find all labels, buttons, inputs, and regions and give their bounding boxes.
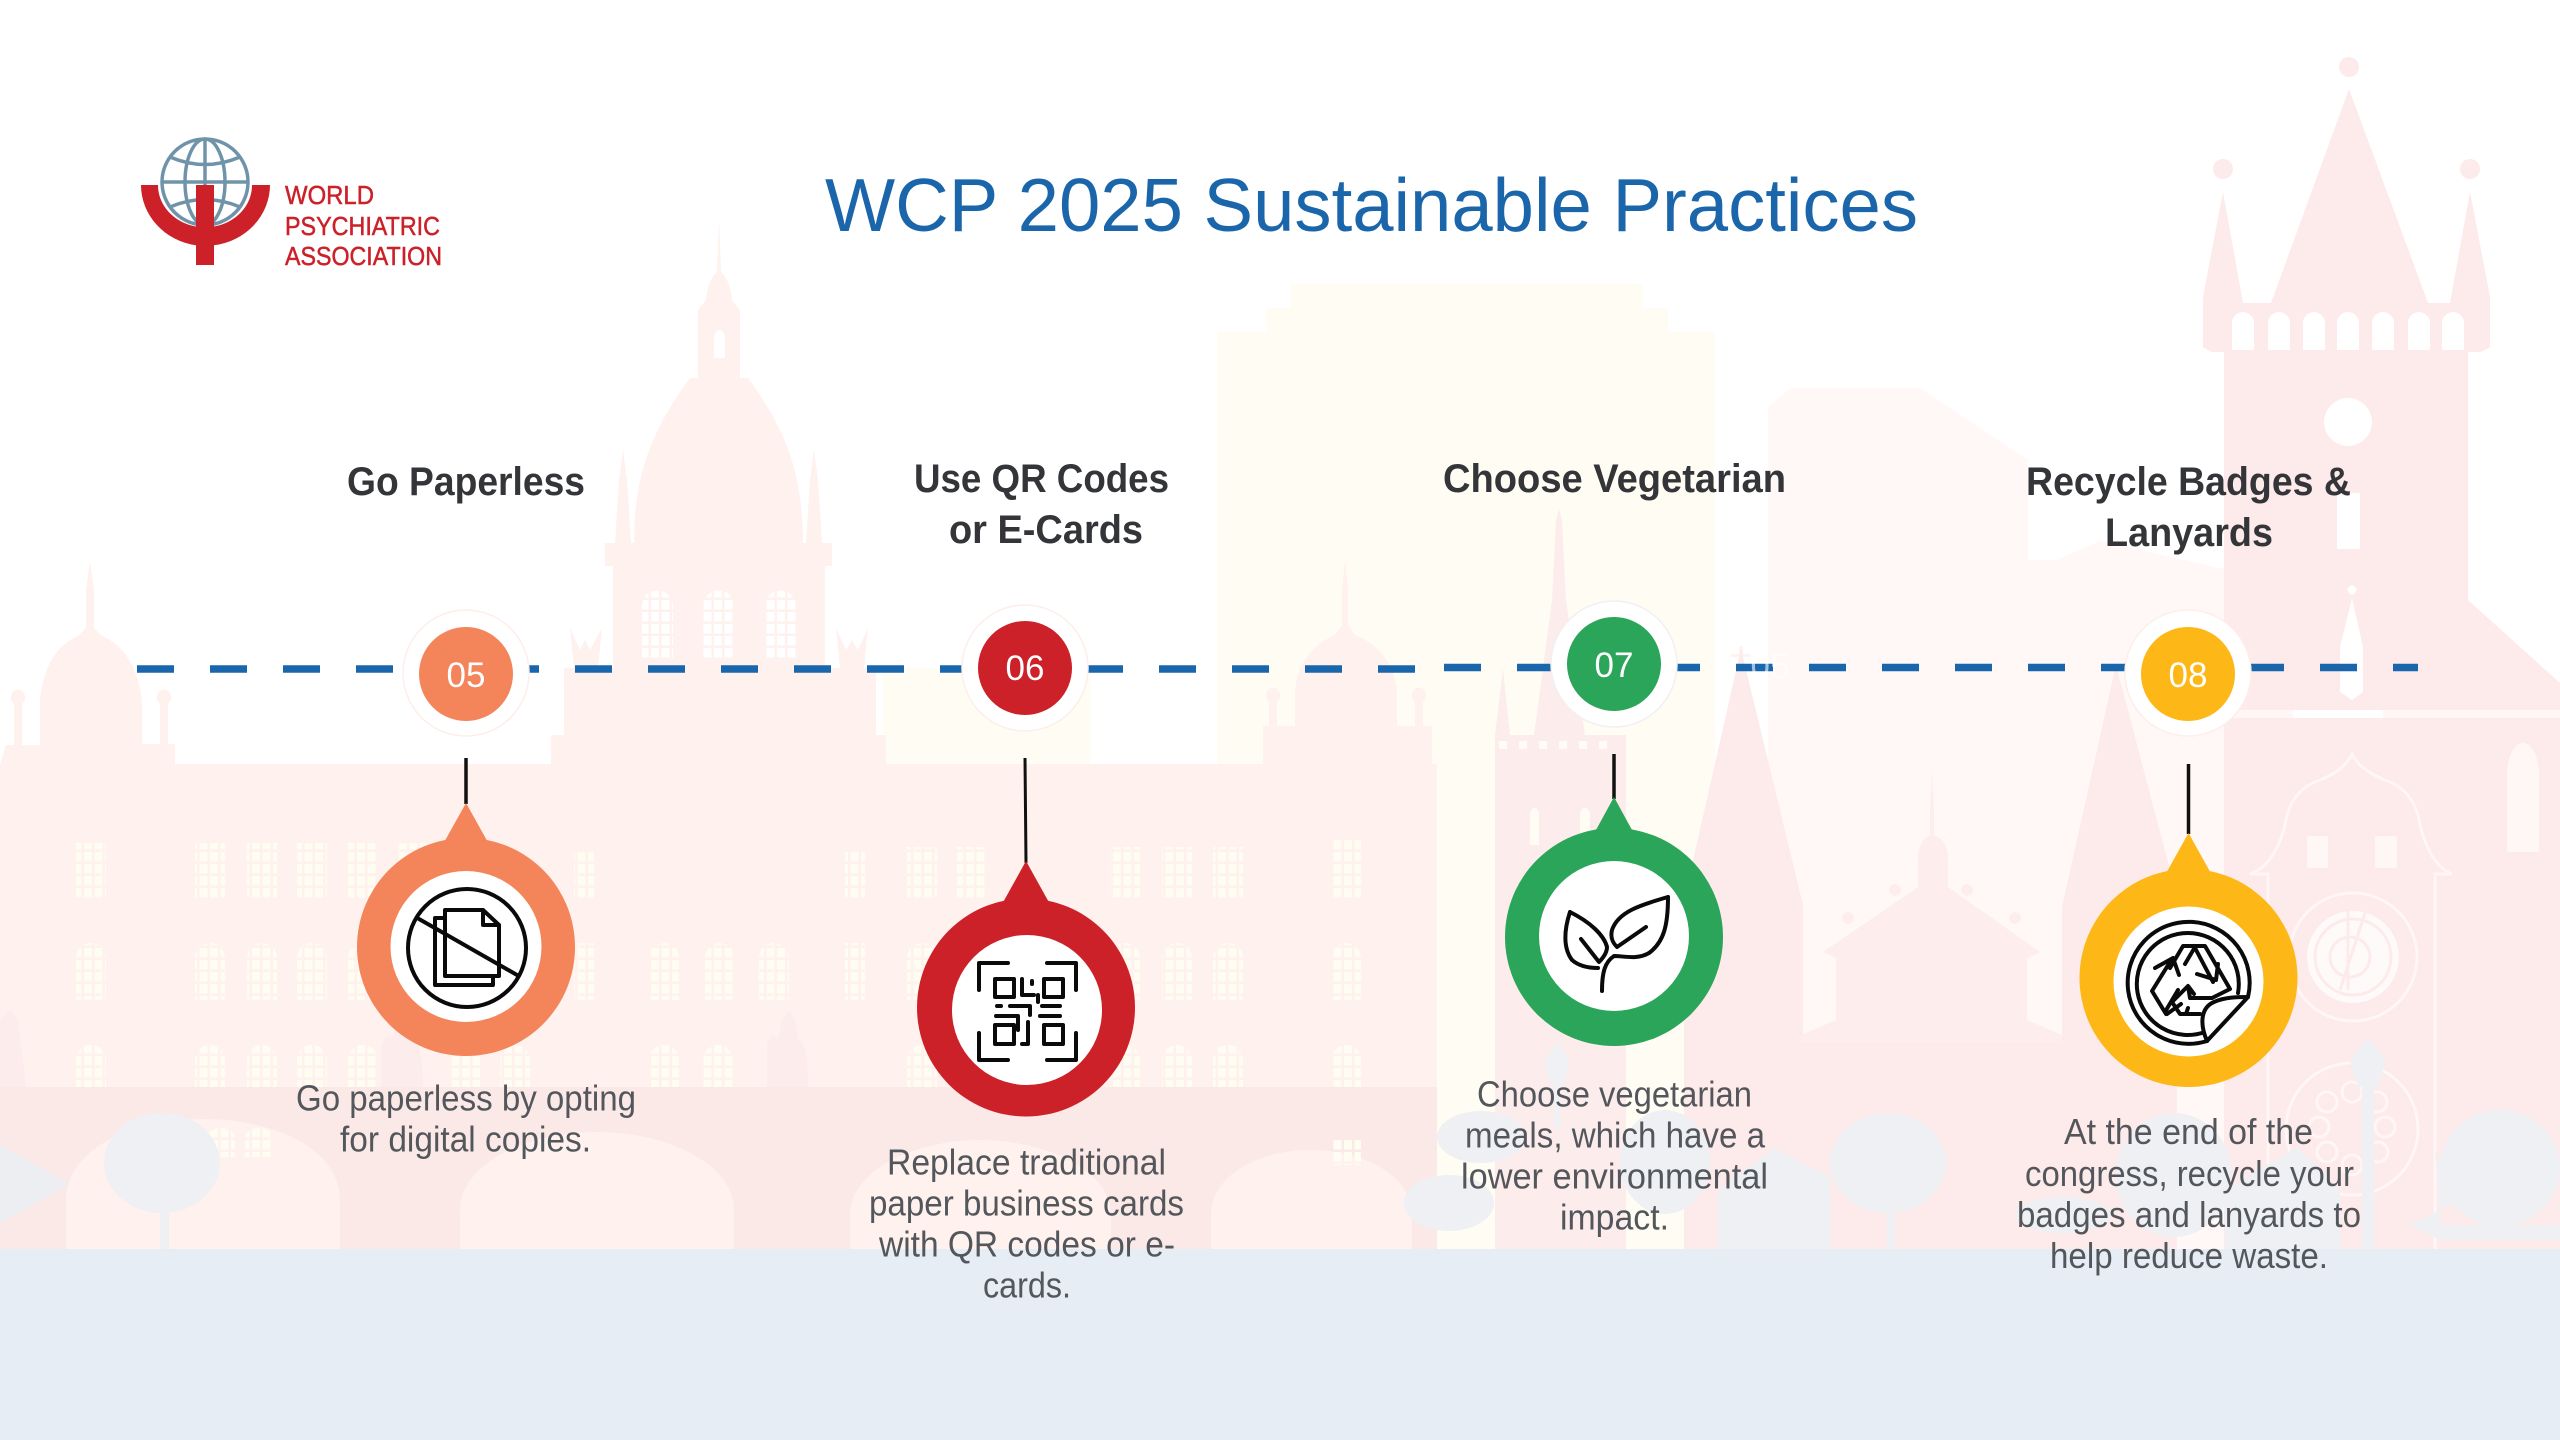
connector bbox=[1025, 758, 1026, 863]
number badge 07: 07 bbox=[1595, 646, 1633, 685]
body text bbox=[2017, 1111, 2361, 1276]
logo wordmark bbox=[285, 180, 442, 271]
number badge 07 bbox=[1551, 601, 1677, 727]
number badge 06 bbox=[962, 605, 1088, 731]
church spires bbox=[1684, 649, 2177, 1249]
logo wordmark: PSYCHIATRIC bbox=[285, 211, 440, 241]
body text bbox=[296, 1078, 636, 1160]
icon: psi symbol bbox=[141, 185, 270, 265]
body text: paper business cards bbox=[869, 1182, 1184, 1224]
icon: leaves bbox=[1565, 897, 1668, 991]
heading bbox=[914, 457, 1169, 552]
number badge 06: 06 bbox=[1006, 649, 1044, 688]
heading bbox=[2026, 460, 2351, 555]
icon: globe bbox=[162, 139, 248, 225]
connector bbox=[1612, 754, 1616, 799]
pin bbox=[1505, 797, 1723, 1046]
icon: no paper bbox=[408, 889, 526, 1007]
gothic tower in the centre bbox=[1495, 509, 1626, 1249]
number badge 05: 05 bbox=[447, 656, 485, 695]
connector bbox=[464, 758, 468, 804]
number badge 08 bbox=[2125, 610, 2251, 736]
palace windows bbox=[76, 840, 1361, 1087]
step 05: Go Paperless bbox=[296, 460, 636, 1160]
ground band bbox=[0, 1249, 2560, 1440]
step 08: Recycle Badges & Lanyards bbox=[2017, 460, 2361, 1276]
body text: badges and lanyards to bbox=[2017, 1194, 2361, 1235]
pin bbox=[357, 803, 575, 1056]
dome building windows bbox=[642, 590, 796, 660]
body text: At the end of the bbox=[2064, 1111, 2313, 1152]
number badge 08: 08 bbox=[2169, 656, 2207, 695]
logo wordmark: WORLD bbox=[285, 180, 374, 210]
pale building behind right side bbox=[1768, 388, 2224, 1249]
number badge 05 bbox=[403, 610, 529, 736]
step 06: Use QR Codes or E-Cards bbox=[869, 457, 1184, 1306]
heading: Lanyards bbox=[2105, 511, 2273, 555]
pin bbox=[2080, 833, 2298, 1087]
small church between spires bbox=[1801, 770, 2062, 1042]
bridge with arches bbox=[0, 1009, 1437, 1249]
large clock tower on the right bbox=[2203, 57, 2560, 1249]
body text: impact. bbox=[1560, 1196, 1669, 1238]
foreground trees and lamps bbox=[0, 1037, 2560, 1249]
left palace with domes bbox=[0, 220, 1437, 1249]
connector bbox=[2187, 764, 2190, 834]
title: WCP 2025 Sustainable Practices bbox=[825, 163, 1918, 247]
icon: recycling sticker bbox=[2128, 922, 2250, 1044]
icon: QR code bbox=[979, 963, 1076, 1060]
body text: Choose vegetarian bbox=[1477, 1074, 1752, 1114]
timeline dashed line bbox=[137, 668, 2418, 669]
body text: congress, recycle your bbox=[2025, 1153, 2354, 1194]
faint ghost number: 05 bbox=[1751, 647, 1789, 686]
body text bbox=[869, 1142, 1184, 1306]
body text: lower environmental bbox=[1461, 1156, 1768, 1196]
heading: Go Paperless bbox=[347, 460, 585, 504]
body text: meals, which have a bbox=[1465, 1114, 1766, 1156]
step 07: Choose Vegetarian bbox=[1443, 457, 1786, 1238]
heading: Choose Vegetarian bbox=[1443, 457, 1786, 501]
heading: Use QR Codes bbox=[914, 457, 1169, 501]
heading: or E-Cards bbox=[949, 508, 1143, 552]
body text: Replace traditional bbox=[887, 1142, 1166, 1182]
body text: Go paperless by opting bbox=[296, 1078, 636, 1118]
logo: World Psychiatric Association bbox=[141, 139, 442, 271]
body text bbox=[1461, 1074, 1768, 1238]
logo wordmark: ASSOCIATION bbox=[285, 241, 442, 271]
body text: help reduce waste. bbox=[2050, 1235, 2328, 1276]
cream building block bbox=[883, 284, 1715, 1249]
body text: for digital copies. bbox=[340, 1118, 591, 1160]
pin bbox=[917, 861, 1135, 1116]
body text: cards. bbox=[983, 1264, 1071, 1306]
body text: with QR codes or e- bbox=[878, 1224, 1175, 1264]
heading: Recycle Badges & bbox=[2026, 460, 2351, 504]
